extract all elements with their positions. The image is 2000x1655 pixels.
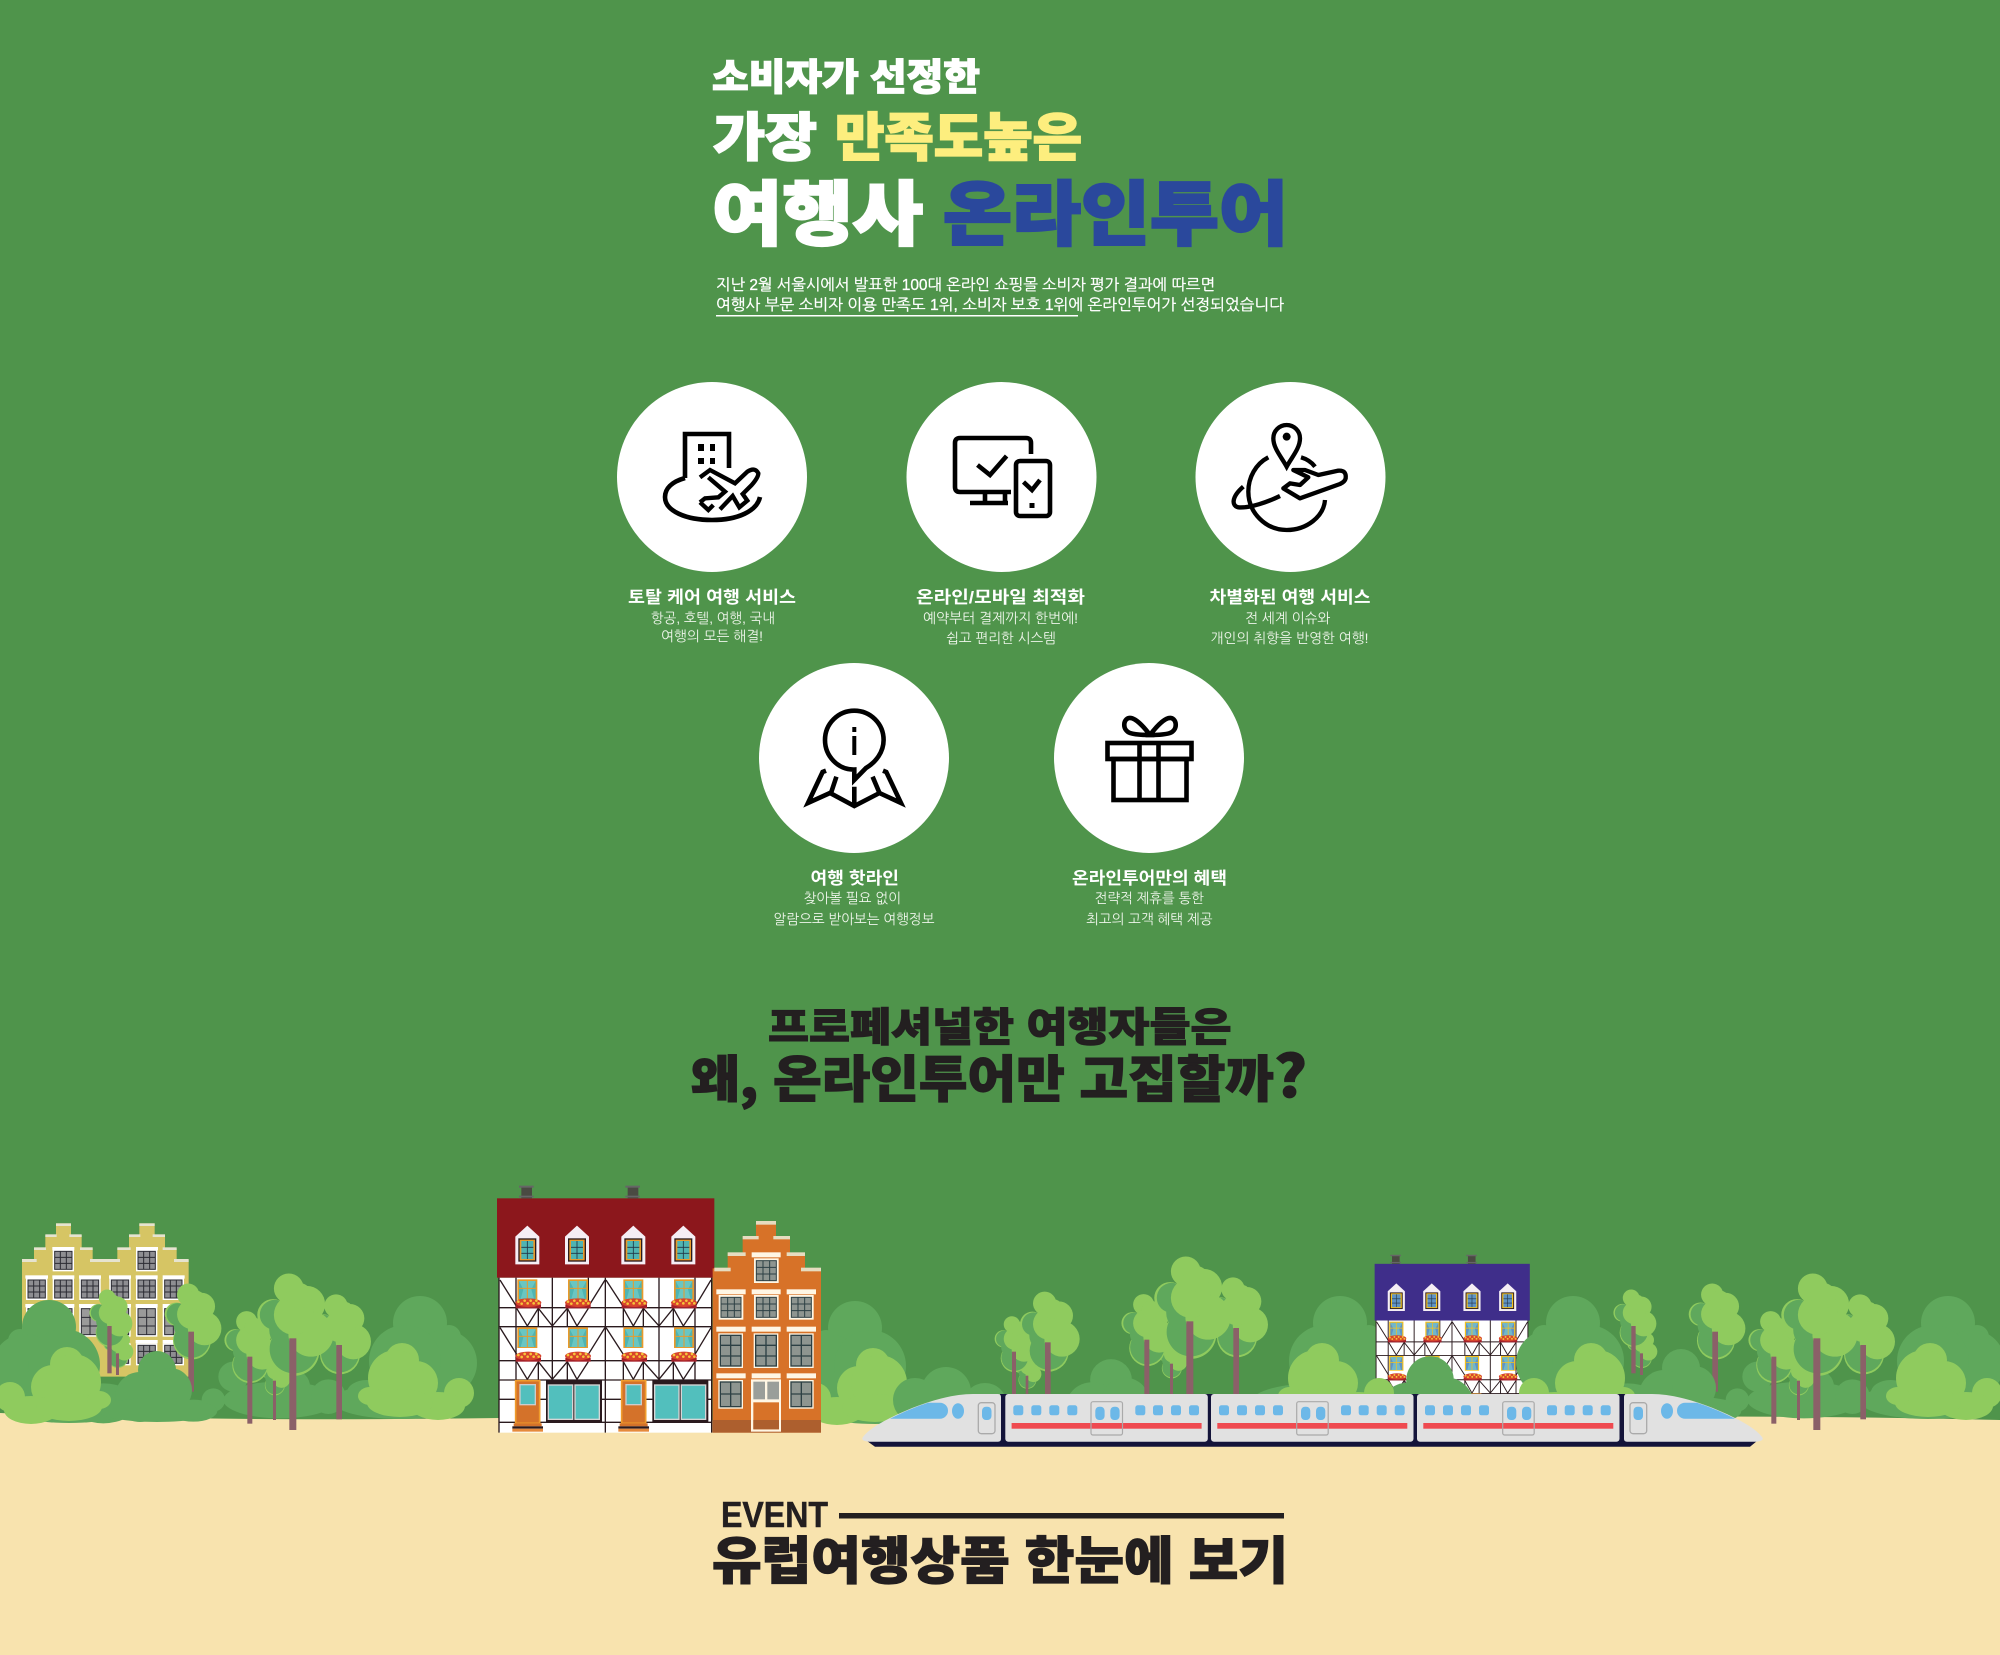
icon: monitor and phone [955, 438, 1050, 516]
card: benefits [1054, 663, 1244, 927]
carriage 3 [1417, 1394, 1620, 1442]
card: total care [617, 382, 807, 644]
card title: 토탈 케어 여행 서비스 [628, 588, 796, 607]
card text: 항공, 호텔, 여행, 국내 [651, 610, 775, 626]
card title: 차별화된 여행 서비스 [1210, 588, 1370, 607]
title line 1: 소비자가 선정한 [712, 47, 980, 101]
bushes [0, 1296, 477, 1424]
card: hotline [759, 663, 949, 927]
card text: 예약부터 결제까지 한번에! [923, 610, 1078, 626]
event heading [712, 1494, 1288, 1594]
scene: left building and trees [0, 1223, 477, 1430]
card text [923, 610, 1078, 646]
icon: globe, pin and plane [1234, 425, 1346, 530]
event label: EVENT [721, 1494, 828, 1535]
title line 3: 여행사 [712, 159, 923, 260]
icon: building and plane [665, 434, 760, 520]
intro text: 지난 2월 서울시에서 발표한 100대 온라인 쇼핑몰 소비자 평가 결과에 따르면 [716, 276, 1215, 294]
title line 2 [713, 96, 1082, 171]
card text [651, 610, 775, 644]
card text [1086, 890, 1212, 927]
intro text: 여행사 부문 소비자 이용 만족도 1위, 소비자 보호 1위에 온라인투어가 선정되었습니다 [716, 296, 1284, 314]
red half-timbered house [497, 1186, 714, 1433]
rear car [1624, 1394, 1763, 1442]
title line 2: 만족도높은 [835, 96, 1082, 171]
title [712, 47, 1288, 260]
card text: 쉽고 편리한 시스템 [946, 630, 1056, 646]
undercarriage [867, 1441, 1757, 1447]
trees behind bushes [89, 1284, 221, 1392]
train [862, 1394, 1763, 1447]
card text: 알람으로 받아보는 여행정보 [774, 911, 934, 927]
scene: middle bushes and trees [798, 1256, 1397, 1437]
front car [862, 1394, 1001, 1442]
card title: 여행 핫라인 [810, 869, 899, 888]
card text [774, 890, 934, 927]
card text [1210, 610, 1368, 646]
card text: 찾아볼 필요 없이 [804, 890, 901, 906]
yellow stepped building [22, 1223, 189, 1377]
heading: why: 왜, 온라인투어만 고집할까 ? [691, 1030, 1307, 1114]
card text: 최고의 고객 혜택 제공 [1086, 911, 1212, 927]
icon: gift box [1108, 718, 1192, 800]
card: online mobile [906, 382, 1096, 646]
scene: right bushes and trees [1278, 1273, 2000, 1445]
title line 2: 가장 [713, 96, 817, 171]
title line 3: 온라인투어 [943, 159, 1288, 260]
card title: 온라인투어만의 혜택 [1072, 869, 1227, 888]
intro text [716, 276, 1284, 316]
ground [0, 1413, 2000, 1655]
event title: 유럽여행상품 한눈에 보기 [712, 1520, 1288, 1594]
title line 3 [712, 159, 1288, 260]
card text: 전략적 제휴를 통한 [1094, 890, 1205, 906]
carriage 1 [1005, 1394, 1208, 1442]
card text: 여행의 모든 해결! [661, 628, 763, 644]
card: differentiated [1196, 382, 1386, 646]
card text: 개인의 취향을 반영한 여행! [1210, 630, 1368, 646]
trees in front [224, 1273, 371, 1430]
bush behind train nose [893, 1367, 1007, 1427]
card text: 전 세계 이슈와 [1245, 610, 1331, 626]
icon: info map pin [808, 711, 901, 806]
orange stepped house [713, 1221, 821, 1433]
card title: 온라인/모바일 최적화 [916, 588, 1085, 607]
carriage 2 [1211, 1394, 1414, 1442]
purple half-timbered house [1375, 1255, 1530, 1431]
heading: why: 프로페셔널한 여행자들은 [768, 995, 1232, 1053]
